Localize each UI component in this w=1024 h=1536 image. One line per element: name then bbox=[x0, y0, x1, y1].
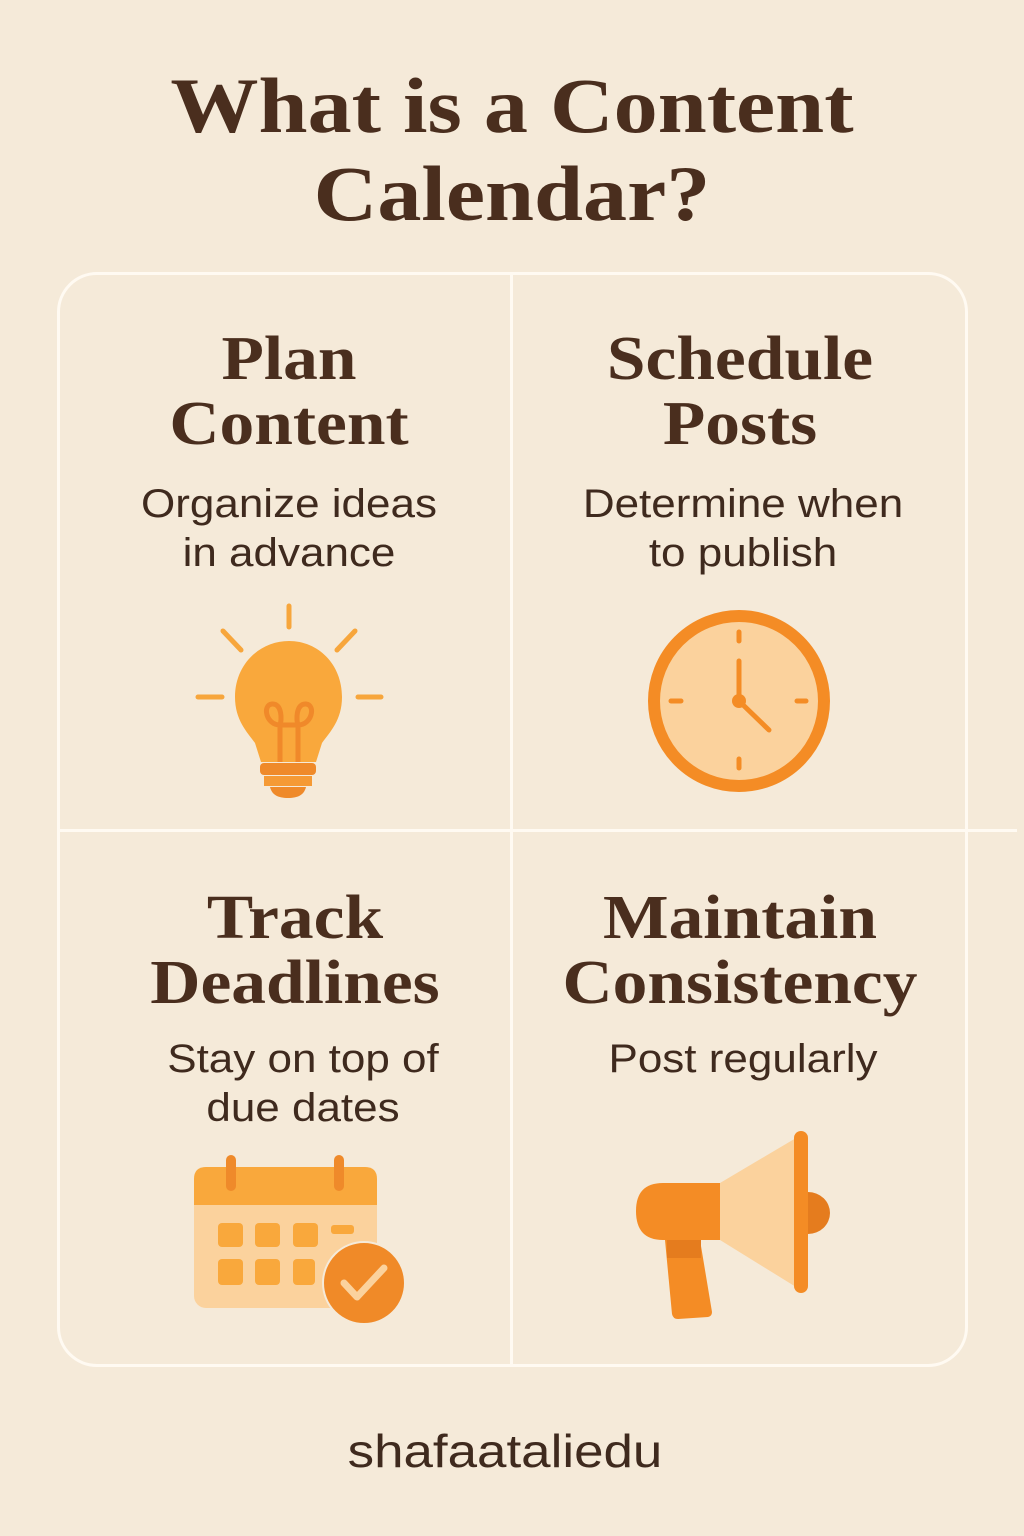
heading: schedule posts bbox=[607, 325, 873, 458]
panel: plan content bbox=[141, 325, 437, 798]
title: What is a Content bbox=[170, 62, 854, 149]
grid panel frame bbox=[57, 272, 968, 1367]
text: determine when: to publish bbox=[649, 531, 837, 575]
heading: track deadlines bbox=[150, 884, 440, 1017]
text: post regularly: Post regularly bbox=[608, 1037, 878, 1081]
heading: maintain consistency bbox=[563, 884, 917, 1017]
panel: schedule posts bbox=[583, 325, 903, 792]
panel: track deadlines bbox=[150, 884, 440, 1323]
text: organize ideas: Organize ideas bbox=[141, 482, 437, 526]
title: Calendar? bbox=[314, 150, 710, 237]
icon: clock bbox=[648, 610, 830, 792]
heading: maintain consistency: Consistency bbox=[563, 949, 917, 1017]
heading: plan content: Content bbox=[169, 390, 409, 458]
text: stay on top bbox=[167, 1037, 439, 1130]
footer: brand: shafaataliedu bbox=[348, 1425, 662, 1477]
heading: plan content bbox=[169, 325, 409, 458]
heading: track deadlines: Track bbox=[207, 884, 383, 952]
icon: megaphone bbox=[636, 1131, 830, 1319]
title bbox=[170, 62, 854, 237]
heading: schedule posts: Posts bbox=[663, 390, 817, 458]
text: stay on top: Stay on top of bbox=[167, 1037, 439, 1081]
text: organize ideas: in advance bbox=[183, 531, 395, 575]
text: organize ideas bbox=[141, 482, 437, 575]
panel: maintain consistency bbox=[563, 884, 917, 1319]
heading: schedule posts: Schedule bbox=[607, 325, 873, 393]
heading: track deadlines: Deadlines bbox=[150, 949, 440, 1017]
text: determine when bbox=[583, 482, 903, 575]
text: determine when: Determine when bbox=[583, 482, 903, 526]
icon: calendar with check bbox=[194, 1155, 404, 1323]
heading: maintain consistency: Maintain bbox=[603, 884, 877, 952]
icon: light bulb bbox=[196, 604, 384, 798]
heading: plan content: Plan bbox=[221, 325, 357, 393]
text: stay on top: due dates bbox=[206, 1086, 400, 1130]
